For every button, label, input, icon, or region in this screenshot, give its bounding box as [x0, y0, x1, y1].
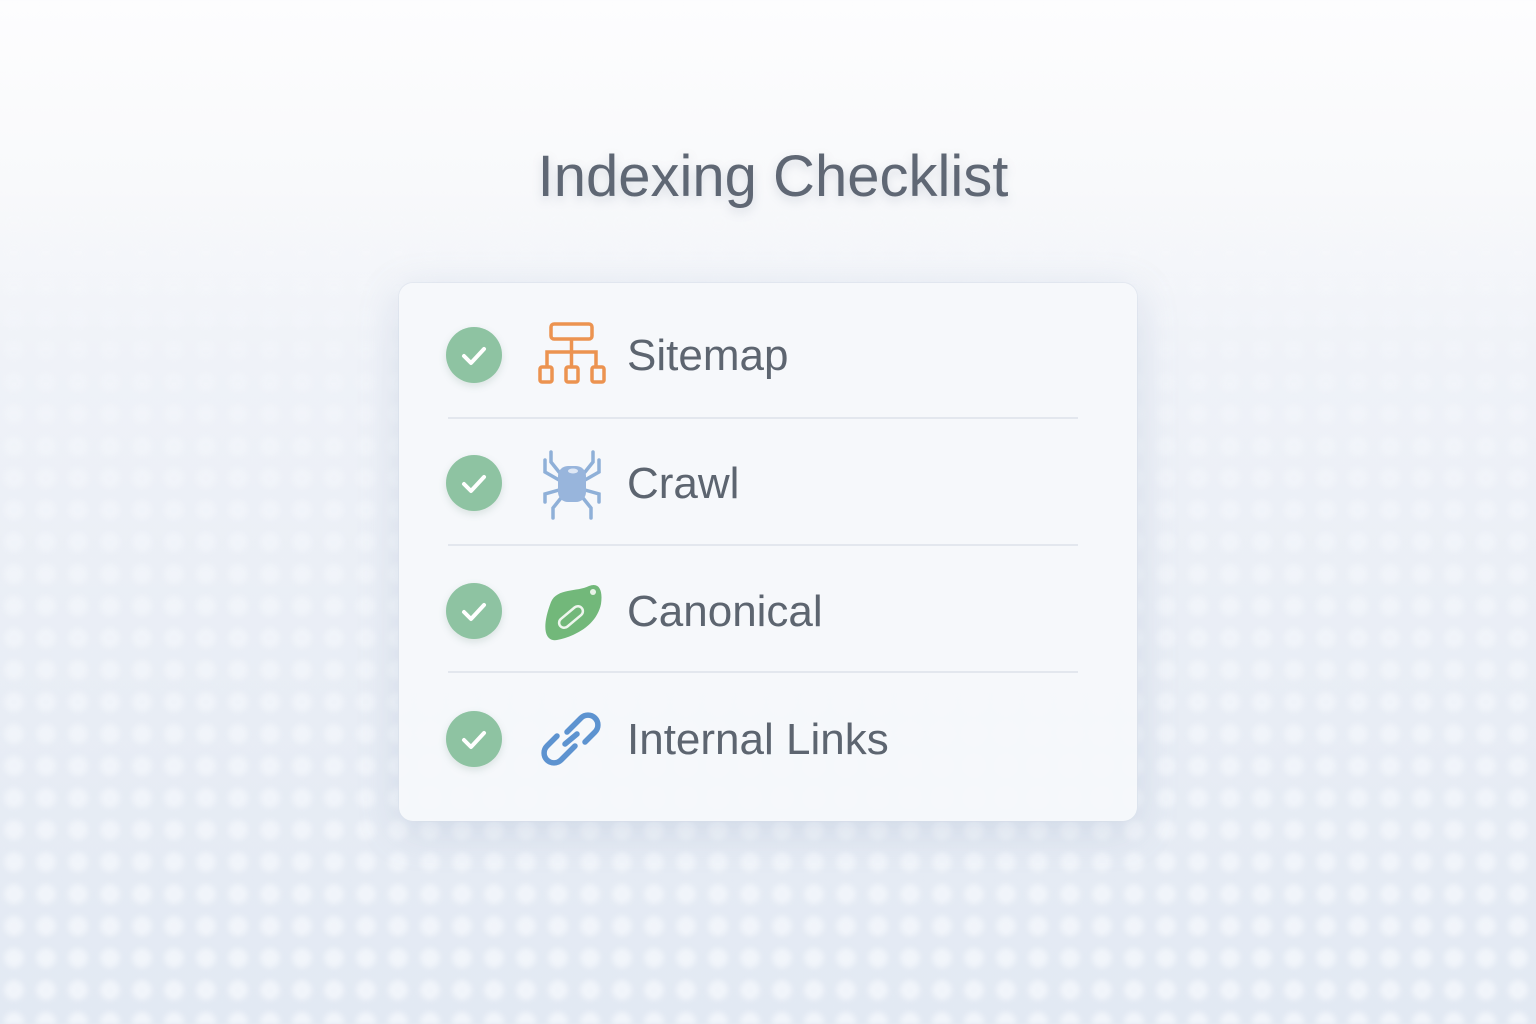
icon: spider [543, 450, 601, 520]
icon: check [446, 583, 502, 639]
icon: check [446, 711, 502, 767]
icon: tag leaf [545, 585, 602, 640]
panel: checklist card [399, 283, 1137, 821]
row: canonical [444, 583, 823, 644]
icon: check [446, 327, 502, 383]
icon: sitemap [538, 322, 606, 384]
icon: check [446, 455, 502, 511]
row: internal links [444, 711, 889, 772]
label: Canonical [627, 587, 823, 636]
row: crawl [444, 450, 739, 520]
label: Internal Links [627, 715, 889, 764]
label: Sitemap [627, 331, 788, 380]
label: Crawl [627, 459, 739, 508]
row: sitemap [444, 322, 788, 388]
icon: chain link [541, 712, 601, 766]
title: Indexing Checklist [538, 144, 1008, 209]
